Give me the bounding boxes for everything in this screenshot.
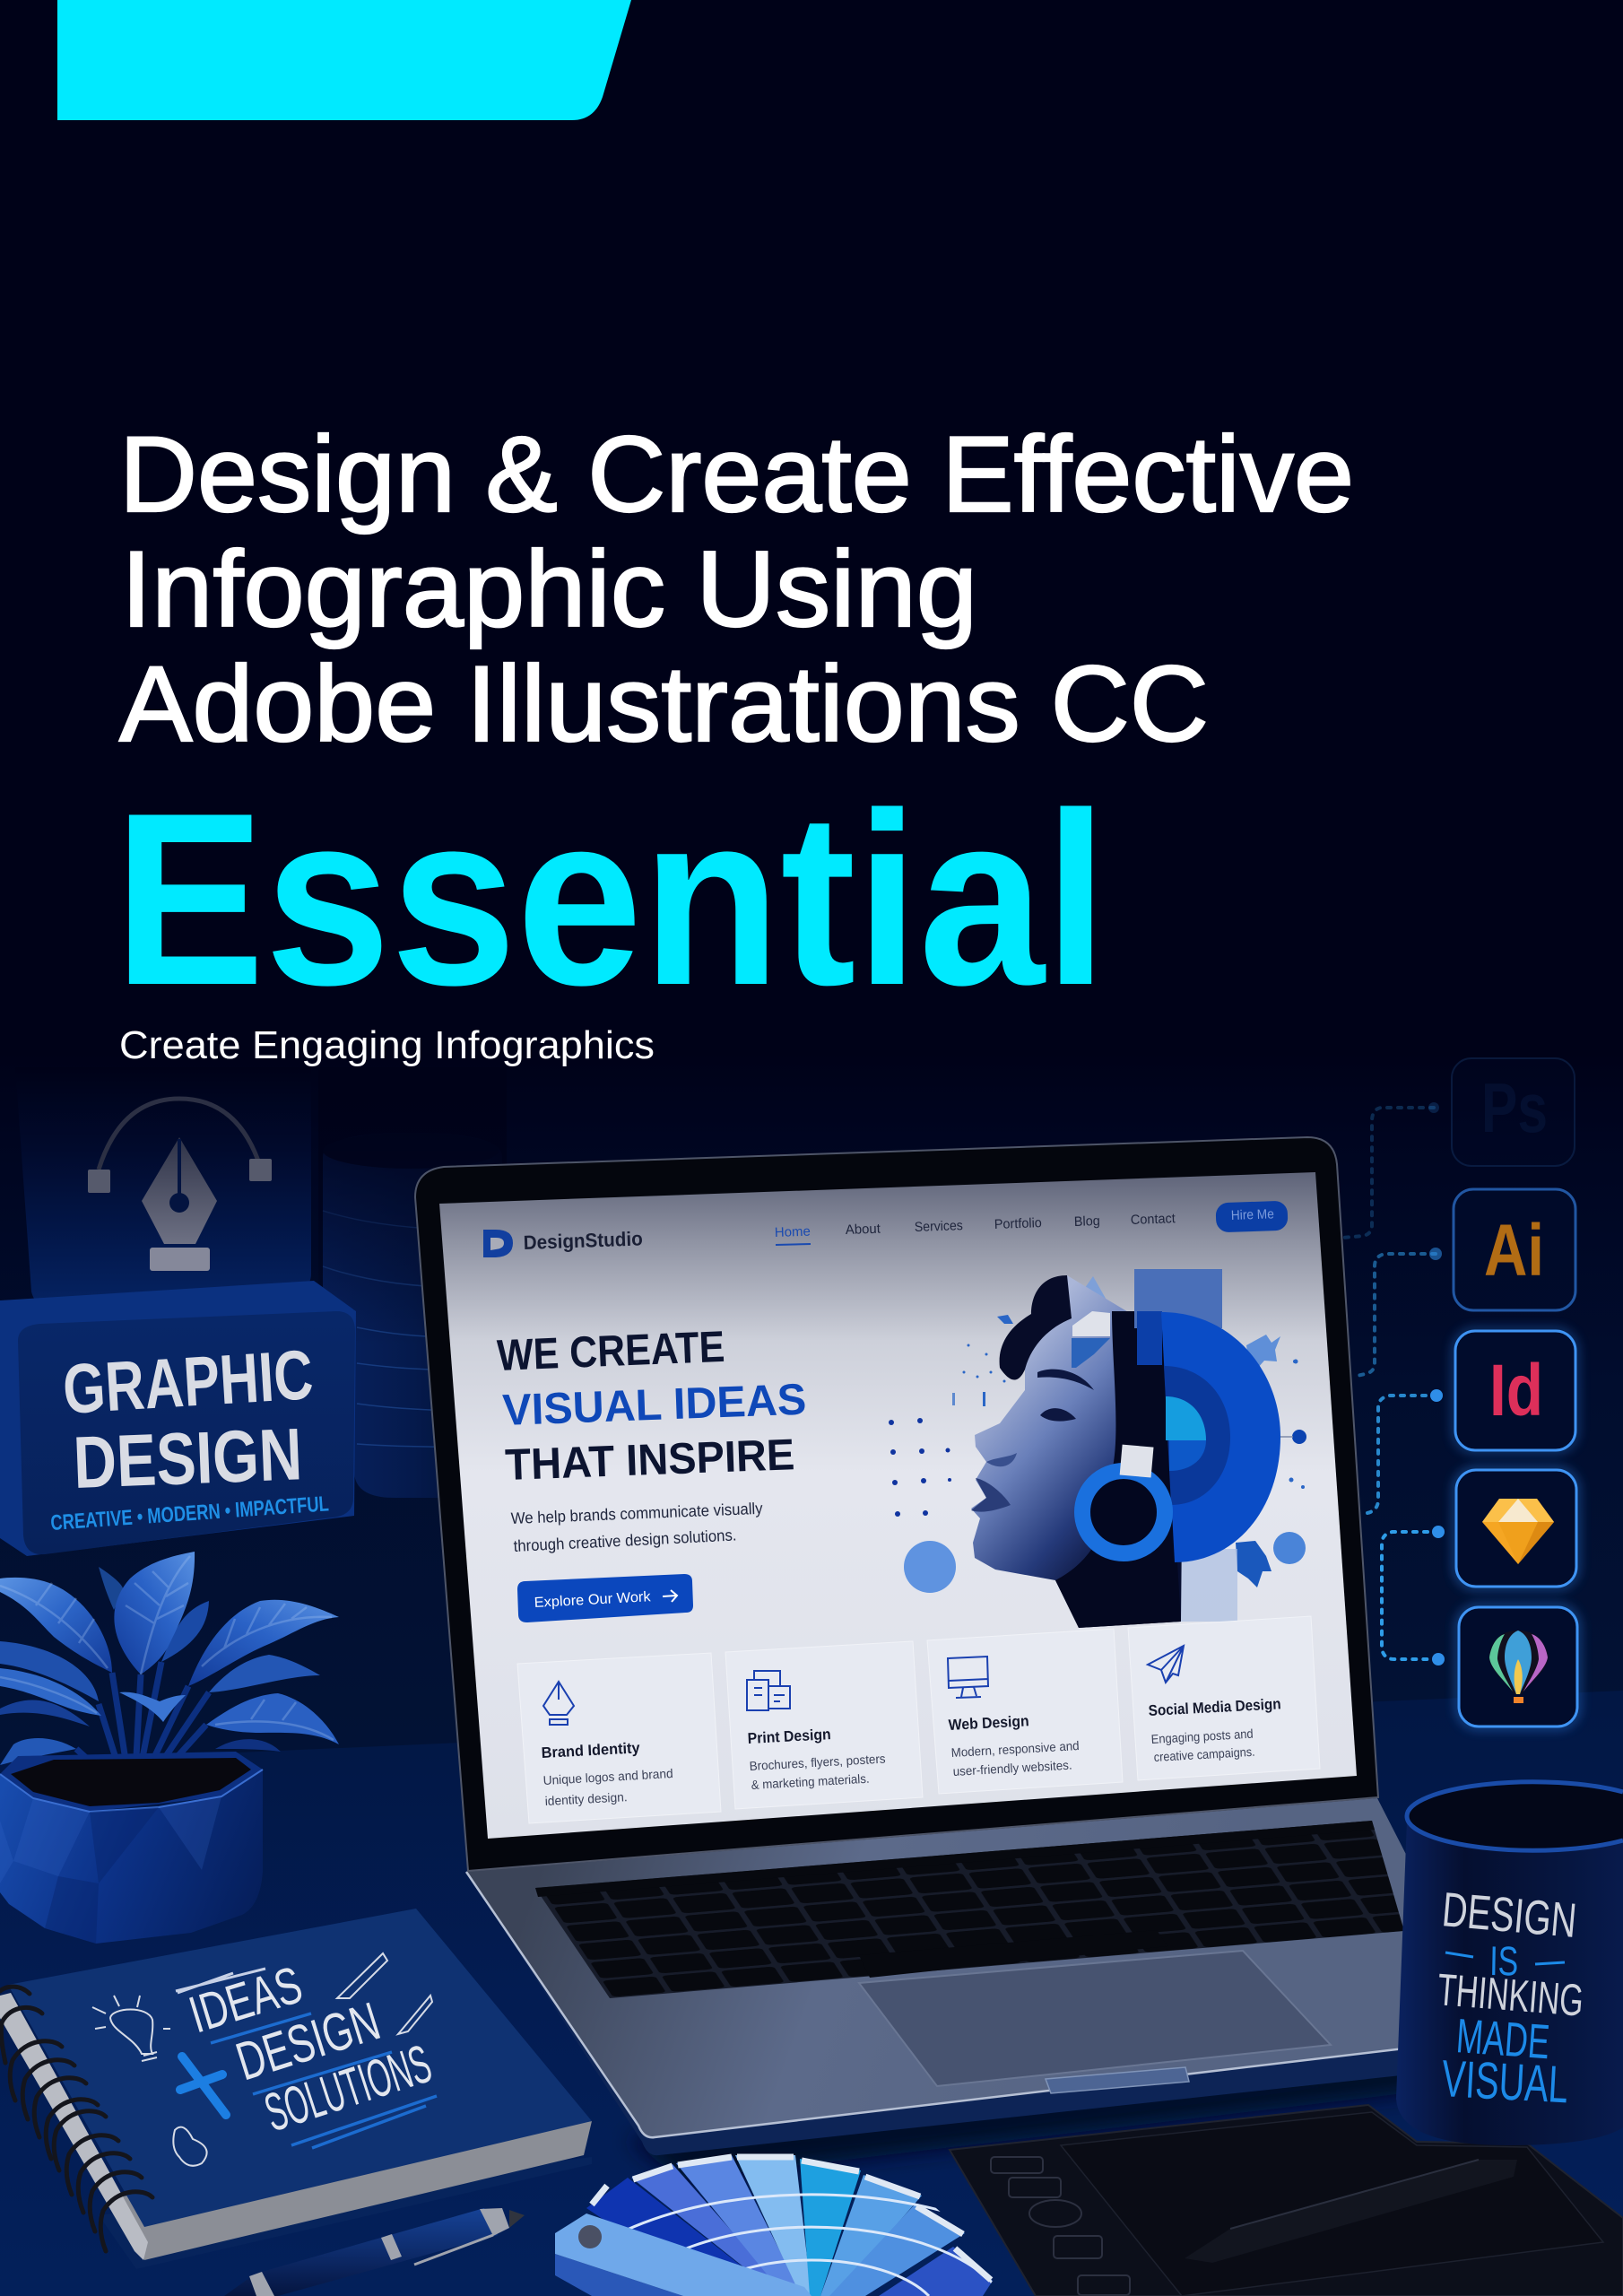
workspace scene — [0, 1049, 1623, 2296]
icon tile: Id — [1455, 1331, 1575, 1450]
plant — [0, 1552, 339, 1944]
service card: social media: Engaging posts and — [1150, 1726, 1254, 1746]
leaf veins — [0, 1556, 334, 1740]
title: Adobe Illustrations CC — [119, 644, 1209, 764]
title: Infographic Using — [121, 529, 977, 649]
website nav bar — [483, 1201, 1289, 1257]
nav links: Blog — [1074, 1213, 1100, 1230]
service card: social media: Social Media Design — [1148, 1695, 1281, 1719]
front notch — [1046, 2067, 1189, 2093]
notebook lettering: IDEAS — [183, 1955, 308, 2044]
service card: brand identity: identity design. — [544, 1789, 628, 1808]
mug lettering: IS — [1489, 1937, 1519, 1985]
pen holder cup — [318, 1067, 507, 1498]
screen — [439, 1172, 1357, 1839]
mug lettering: VISUAL — [1440, 2049, 1570, 2114]
highlighted word: Essential: Essential — [114, 762, 1107, 1037]
swatch rivet — [578, 2225, 602, 2248]
notebook pages — [117, 2121, 592, 2260]
decorative dots — [889, 1418, 951, 1517]
large blue half circle — [1161, 1312, 1280, 1562]
service card: web design — [927, 1629, 1123, 1794]
icon tile: Sketch — [1456, 1470, 1576, 1587]
doodle: pencils — [337, 1953, 432, 2034]
explore button — [517, 1574, 693, 1622]
explore button: Explore Our Work — [534, 1589, 652, 1611]
box headline: DESIGN — [72, 1413, 304, 1504]
laptop shadow — [628, 2058, 1435, 2179]
doodle: light bulb — [92, 1996, 170, 2061]
nav links: Portfolio — [994, 1215, 1042, 1232]
connector nodes — [1428, 1102, 1445, 1665]
icon tile: balloon — [1459, 1607, 1577, 1726]
swatch cover — [555, 2254, 683, 2296]
hero headline: WE CREATE — [496, 1323, 725, 1380]
hire me button: Hire Me — [1231, 1206, 1274, 1223]
service card: print design: & marketing materials. — [751, 1771, 870, 1792]
hero description: We help brands communicate visually — [510, 1500, 763, 1527]
subtitle: Create Engaging Infographics — [119, 1023, 655, 1067]
service card: brand identity — [517, 1653, 721, 1823]
title — [119, 414, 1354, 764]
leaves — [0, 1552, 339, 1765]
laptop — [415, 1137, 1435, 2155]
ring — [1082, 1471, 1165, 1553]
swatch stripes — [628, 2193, 993, 2296]
icon: print — [747, 1671, 790, 1710]
laptop base — [466, 1798, 1435, 2155]
mug lettering: MADE — [1454, 2009, 1551, 2069]
notebook lettering: DESIGN — [230, 1990, 386, 2092]
nav links — [775, 1211, 1176, 1240]
title: Design & Create Effective — [119, 414, 1354, 535]
icon tile: Ai: Ai — [1484, 1210, 1544, 1292]
hero description — [510, 1500, 763, 1555]
service card: web design: Web Design — [948, 1712, 1029, 1734]
colour swatch fan — [555, 2154, 994, 2296]
swatch white caps — [592, 2157, 991, 2280]
mug lettering — [1436, 1883, 1585, 2114]
pale rectangles — [1180, 1549, 1237, 1622]
spiral binding — [0, 1987, 152, 2260]
dark hair panel — [1055, 1311, 1181, 1628]
trackpad — [859, 1951, 1331, 2086]
icon: pen tool nib — [88, 1099, 272, 1271]
hire me button — [1215, 1201, 1289, 1232]
stems — [76, 1662, 209, 1789]
cyan header tab — [57, 0, 631, 120]
box headline — [61, 1335, 316, 1504]
notebook lettering: SOLUTIONS — [257, 2033, 438, 2143]
spiral notebook — [0, 1909, 592, 2269]
service card: print design: Print Design — [747, 1726, 831, 1747]
service card: social media — [1128, 1616, 1320, 1780]
spacebar — [859, 1930, 1167, 1978]
service card: print design: Brochures, flyers, posters — [749, 1752, 886, 1773]
notebook back cover — [99, 2157, 592, 2269]
3D box: graphic design label — [0, 1281, 356, 1556]
box tagline: CREATIVE • MODERN • IMPACTFUL — [50, 1492, 330, 1535]
pot facets — [0, 1796, 221, 1883]
service card: web design: user-friendly websites. — [952, 1758, 1072, 1779]
hero description: through creative design solutions. — [513, 1526, 737, 1555]
hair strands — [1000, 1275, 1072, 1380]
software icon connectors — [1342, 1108, 1438, 1659]
pot — [0, 1752, 263, 1944]
mosaic — [1072, 1269, 1222, 1368]
site logo — [483, 1230, 513, 1257]
icon: nib — [543, 1682, 574, 1725]
hero headline: THAT INSPIRE — [504, 1431, 795, 1490]
service card: web design: Modern, responsive and — [950, 1738, 1080, 1760]
nav links: Services — [915, 1218, 963, 1235]
facial details — [971, 1370, 1094, 1512]
box headline: GRAPHIC — [61, 1335, 316, 1429]
nav links: About — [846, 1222, 881, 1238]
head and neck — [971, 1275, 1184, 1628]
icon tile: Ps: Ps — [1481, 1068, 1548, 1147]
icon tile: Ps — [1452, 1058, 1575, 1166]
service card: brand identity: Brand Identity — [541, 1739, 641, 1761]
laptop lid — [415, 1137, 1378, 1871]
service card: social media: creative campaigns. — [1153, 1744, 1255, 1764]
service card: brand identity: Unique logos and brand — [542, 1766, 673, 1787]
keyboard — [535, 1821, 1404, 1998]
service card: print design — [725, 1641, 923, 1809]
website nav bar: DesignStudio — [523, 1227, 643, 1254]
hero portrait collage — [889, 1269, 1306, 1628]
notebook cover — [8, 1909, 592, 2227]
sketch diamond — [1482, 1499, 1554, 1564]
nav links: Contact — [1131, 1211, 1176, 1228]
inner half circle — [1164, 1366, 1230, 1505]
3D box: pen tool — [15, 1067, 311, 1311]
doodle: apple — [173, 2127, 207, 2166]
stylus — [1185, 2160, 1517, 2263]
coffee mug — [1396, 1782, 1623, 2145]
hero headline: VISUAL IDEAS — [501, 1376, 807, 1435]
paint splatter — [952, 1315, 1305, 1587]
accent circles — [904, 1541, 956, 1593]
drawing tablet — [950, 2105, 1623, 2296]
scene backdrop — [0, 1049, 1623, 1794]
notebook lettering — [183, 1955, 438, 2143]
blue plus — [180, 2057, 226, 2115]
balloon logo — [1489, 1631, 1548, 1703]
icon: paper plane — [1148, 1646, 1184, 1683]
desk surface — [0, 1691, 1623, 2296]
icon tile: Ai — [1454, 1189, 1575, 1310]
icon: monitor — [948, 1657, 988, 1698]
icon tile: Id: Id — [1489, 1350, 1543, 1431]
ballpoint pen — [224, 2208, 525, 2296]
blue underlines — [211, 2013, 437, 2148]
tablet buttons — [991, 2157, 1130, 2295]
nav links: Home — [775, 1224, 811, 1240]
hero headline — [496, 1323, 807, 1490]
